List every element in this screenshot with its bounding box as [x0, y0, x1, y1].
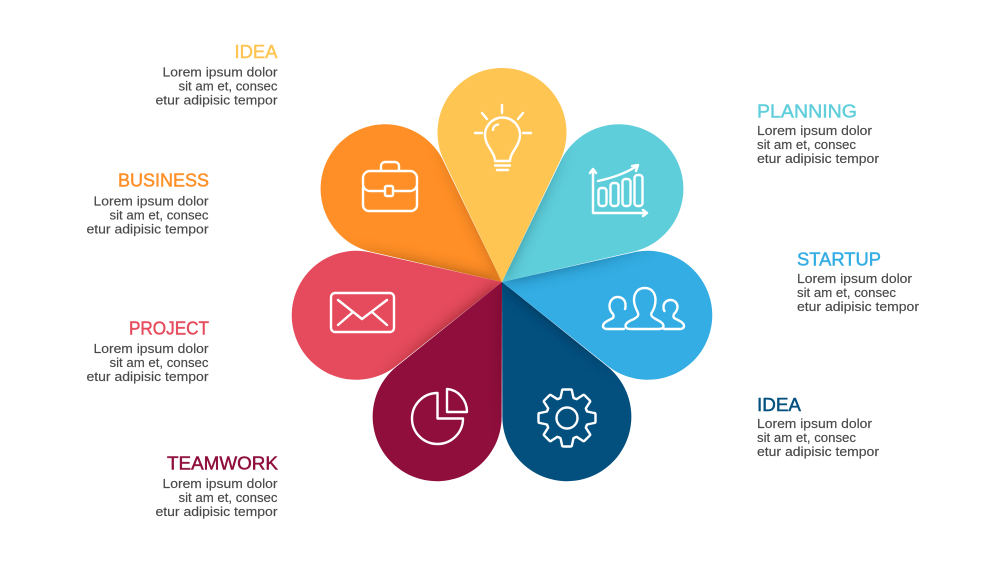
body: teamwork: Lorem ipsum dolor — [162, 476, 278, 491]
body: idea navy: sit am et, consec — [757, 430, 856, 445]
body: startup: Lorem ipsum dolor — [797, 271, 913, 286]
icon: growth chart — [590, 165, 647, 216]
body: project — [86, 341, 209, 384]
body: project: sit am et, consec — [110, 355, 209, 370]
heading: project: PROJECT — [129, 318, 209, 338]
body: project: Lorem ipsum dolor — [94, 341, 209, 356]
body: idea — [156, 64, 278, 108]
body: idea navy: Lorem ipsum dolor — [757, 416, 873, 431]
petal: yellow — [437, 68, 566, 282]
body: idea: Lorem ipsum dolor — [162, 64, 278, 80]
body: project: etur adipisic tempor — [86, 369, 209, 384]
body: teamwork — [156, 476, 278, 519]
icon: pie chart — [412, 389, 467, 444]
text block: business — [86, 170, 209, 236]
text block: planning — [757, 100, 880, 166]
body: planning: sit am et, consec — [757, 137, 856, 152]
icon: envelope — [331, 293, 394, 332]
body: idea: etur adipisic tempor — [156, 92, 278, 108]
body: planning: Lorem ipsum dolor — [757, 123, 873, 138]
petal: navy — [444, 254, 653, 503]
body: teamwork: etur adipisic tempor — [156, 504, 278, 519]
body: idea navy — [757, 416, 880, 459]
body: planning — [757, 123, 880, 166]
icon: gear — [538, 390, 596, 446]
body: idea navy: etur adipisic tempor — [757, 444, 880, 459]
icon: people — [603, 288, 684, 329]
body: teamwork: sit am et, consec — [178, 490, 278, 505]
body: business — [86, 194, 209, 236]
heading: idea: IDEA — [234, 41, 278, 62]
body: idea: sit am et, consec — [178, 78, 278, 94]
body: startup: sit am et, consec — [797, 285, 896, 300]
text block: idea yellow — [156, 41, 278, 108]
heading: planning: PLANNING — [757, 100, 857, 122]
petal: orange — [294, 98, 542, 332]
body: business: sit am et, consec — [110, 208, 209, 222]
petal: maroon — [351, 254, 560, 503]
icon: light bulb — [475, 105, 531, 170]
text block: project — [86, 318, 209, 384]
body: business: Lorem ipsum dolor — [94, 194, 209, 208]
text block: teamwork — [156, 452, 279, 519]
heading: teamwork: TEAMWORK — [167, 452, 279, 474]
text block: idea navy — [757, 394, 880, 459]
petal: teal — [462, 98, 710, 332]
text block: startup — [797, 248, 920, 314]
icon: briefcase — [363, 162, 417, 211]
heading: startup: STARTUP — [797, 248, 881, 270]
petal flower diagram — [292, 68, 712, 482]
heading: business: BUSINESS — [118, 170, 209, 190]
body: business: etur adipisic tempor — [86, 222, 209, 236]
petal: red — [279, 219, 516, 393]
body: startup: etur adipisic tempor — [797, 299, 920, 314]
body: planning: etur adipisic tempor — [757, 151, 880, 166]
petal: sky blue — [488, 219, 725, 393]
body: startup — [797, 271, 920, 314]
heading: idea navy: IDEA — [757, 394, 802, 415]
